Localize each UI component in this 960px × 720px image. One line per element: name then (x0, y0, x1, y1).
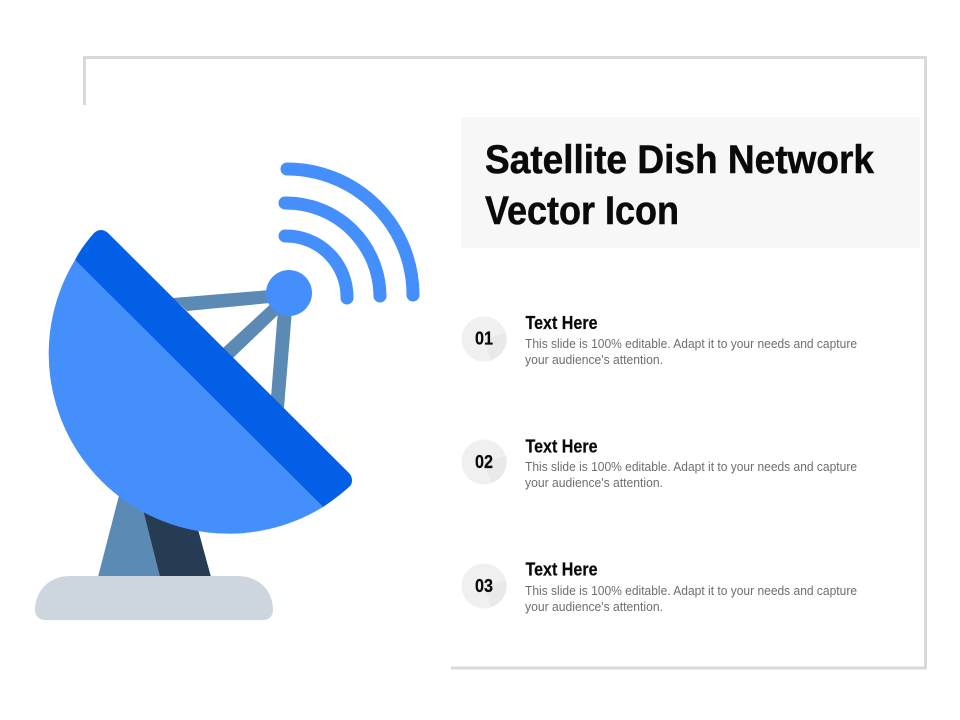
number badge 02: 02 (475, 452, 493, 472)
icon: antenna struts (173, 290, 292, 408)
icon: signal emitter (266, 270, 312, 316)
number badge 01: 01 (475, 328, 493, 348)
item text 03: This slide is 100% editable. Adapt it to your needs and capture (525, 583, 857, 598)
icon: dish stand dark side (138, 490, 211, 577)
item 03 (462, 560, 857, 614)
icon: dish stand light side (98, 480, 160, 577)
icon: dish rim band (75, 230, 352, 507)
item heading 02: Text Here (526, 436, 598, 456)
icon: dish base (35, 576, 273, 620)
item text 02 (525, 459, 857, 490)
item text 03 (525, 583, 857, 614)
number badge 03: 03 (475, 576, 493, 596)
item text 01 (525, 336, 857, 367)
item text 02: This slide is 100% editable. Adapt it to your needs and capture (525, 459, 857, 474)
item heading 01: Text Here (526, 313, 598, 333)
number badge 01 (462, 316, 507, 362)
icon: signal waves (285, 169, 413, 298)
number badge 03 (462, 564, 507, 608)
item heading 03: Text Here (526, 560, 598, 580)
frame border (84, 58, 926, 668)
item text 02: your audience's attention. (525, 475, 663, 490)
item text 03: your audience's attention. (525, 599, 663, 614)
title panel (461, 117, 920, 248)
item 01 (462, 313, 857, 367)
title (485, 138, 875, 233)
item 02 (462, 436, 857, 490)
item text 01: This slide is 100% editable. Adapt it to your needs and capture (525, 336, 857, 351)
number badge 02 (462, 440, 507, 484)
icon: satellite dish (35, 169, 413, 620)
title: Satellite Dish Network (485, 138, 875, 182)
title: Vector Icon (485, 189, 679, 233)
icon: dish bowl (49, 260, 323, 534)
item text 01: your audience's attention. (525, 352, 663, 367)
